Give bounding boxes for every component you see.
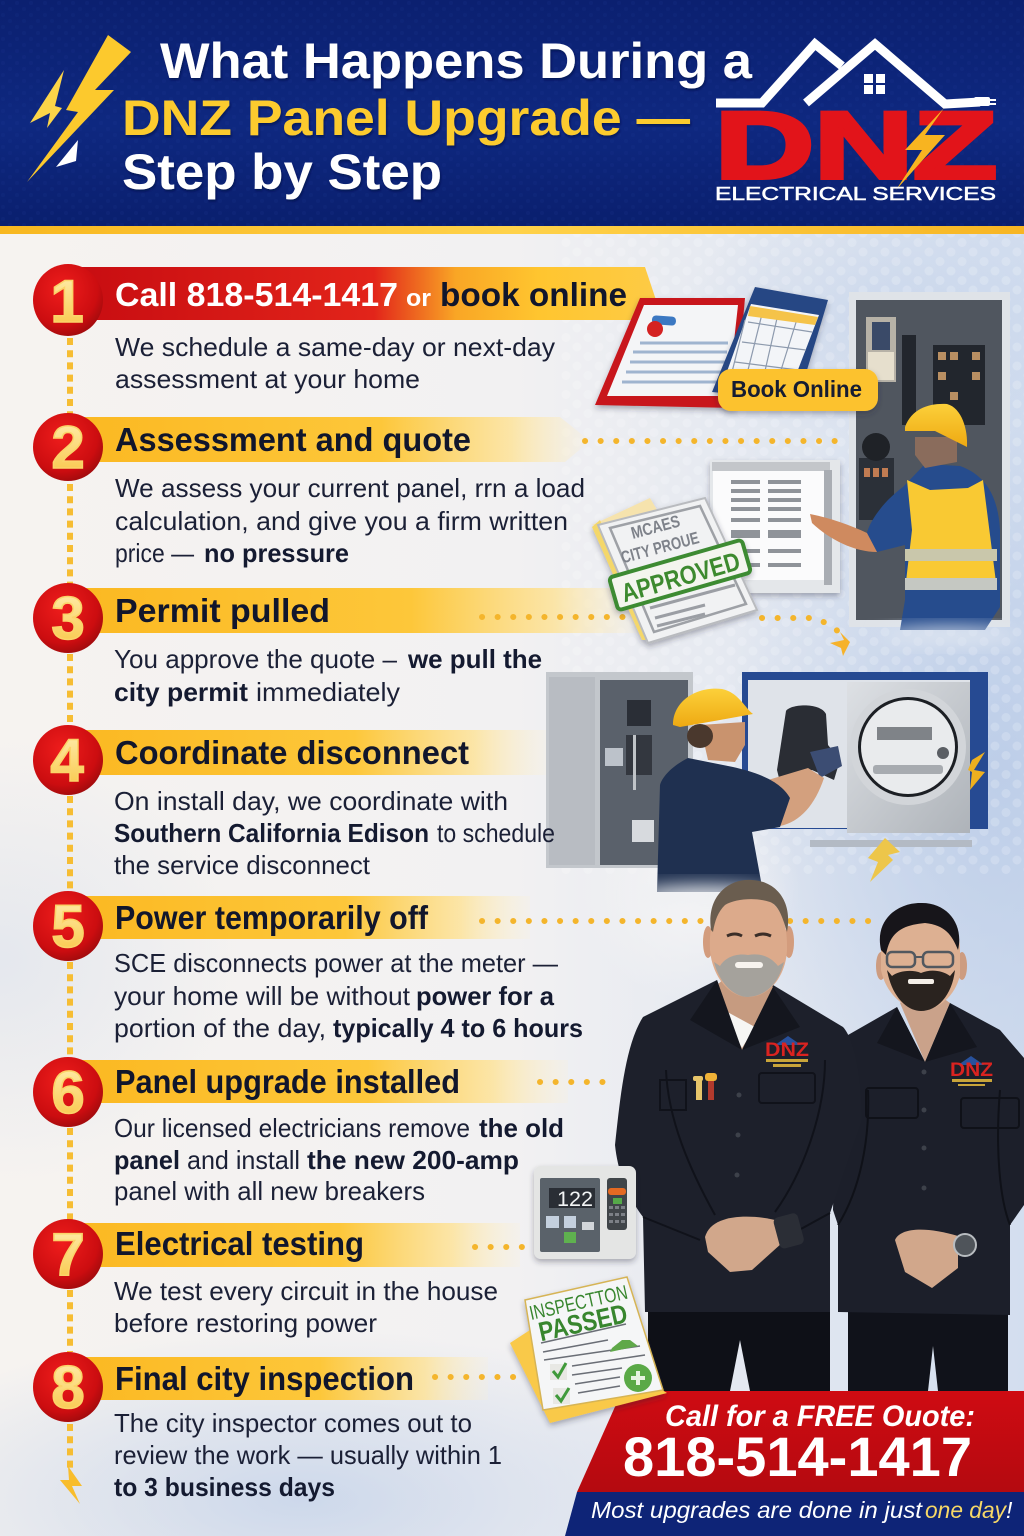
step 6 text: the new 200-amp bbox=[307, 1145, 519, 1175]
CTA tagline: ! bbox=[1006, 1497, 1013, 1523]
shirt logo right: DNZ bbox=[950, 1060, 993, 1081]
step 5 bbox=[33, 891, 583, 1043]
shirt logo left bbox=[765, 1036, 809, 1067]
step 6 band bbox=[68, 1060, 568, 1103]
step 7 badge: 7 bbox=[51, 1221, 85, 1288]
step 5 band bbox=[68, 896, 530, 939]
step 6 text bbox=[114, 1113, 564, 1206]
step 2 text: price — bbox=[115, 538, 194, 568]
CTA tagline: one day bbox=[925, 1497, 1007, 1523]
step 5 text: portion of the day, bbox=[114, 1013, 326, 1043]
illustration: testing device bbox=[534, 1166, 636, 1259]
step 1 heading: Call 818-514-1417 bbox=[115, 276, 398, 313]
illustration: clipboard, calendar and Book Online button bbox=[595, 287, 878, 411]
illustration: electrician at open panel bbox=[810, 292, 1020, 644]
step 4 heading: Coordinate disconnect bbox=[115, 734, 469, 771]
cabinet bbox=[849, 292, 1010, 627]
clipboard bbox=[595, 298, 745, 408]
step 3 bbox=[33, 583, 640, 707]
electrician left bbox=[615, 880, 862, 1391]
approved permit document: MCAES bbox=[629, 512, 682, 543]
CTA heading: Call for a FREE Ouote: bbox=[665, 1400, 975, 1433]
step 2 text: calculation, and give you a firm written bbox=[115, 506, 568, 536]
step 6 badge bbox=[33, 1057, 103, 1127]
step 2 badge bbox=[33, 413, 103, 481]
title bbox=[122, 33, 753, 200]
step 1 text bbox=[115, 332, 555, 394]
step 4 text: Southern California Edison bbox=[114, 818, 429, 848]
logo: DNZ Electrical Services bbox=[715, 44, 997, 204]
step 8 bbox=[33, 1352, 502, 1502]
step 1 badge: 1 bbox=[50, 268, 84, 335]
step 1 band bbox=[68, 267, 656, 320]
connector dots bbox=[435, 441, 880, 1377]
step 3 text: city permit bbox=[114, 677, 248, 707]
step 6 text: the old bbox=[479, 1113, 564, 1143]
step 4 badge: 4 bbox=[50, 727, 84, 794]
step 3 heading: Permit pulled bbox=[115, 592, 330, 629]
illustration: permit window and approved document bbox=[592, 460, 840, 643]
step 4 text: to schedule bbox=[437, 818, 555, 848]
illustration: inspection passed document bbox=[510, 1277, 667, 1423]
fade under lineman bbox=[635, 886, 775, 906]
step 8 band bbox=[68, 1357, 488, 1400]
step 5 text: SCE disconnects power at the meter — bbox=[114, 948, 558, 978]
step 6 text: and install bbox=[187, 1145, 300, 1175]
step 3 text bbox=[114, 644, 542, 707]
step 8 text: The city inspector comes out to bbox=[114, 1408, 472, 1438]
approved permit document bbox=[592, 498, 757, 643]
Book Online button: Book Online bbox=[731, 376, 862, 402]
illustration: inspection passed document: PASSED bbox=[536, 1298, 630, 1347]
step 7 badge bbox=[33, 1219, 103, 1289]
step 8 badge: 8 bbox=[51, 1354, 85, 1421]
step 4 bbox=[33, 725, 555, 880]
shirt logo left: DNZ bbox=[765, 1040, 809, 1061]
step 5 text bbox=[114, 948, 583, 1043]
load calculation window bbox=[710, 460, 840, 593]
meter box bbox=[742, 672, 988, 847]
approved permit document: APPROVED bbox=[618, 546, 743, 608]
step 5 heading: Power temporarily off bbox=[115, 899, 429, 936]
lineman bbox=[657, 689, 842, 892]
step 7 heading: Electrical testing bbox=[115, 1225, 364, 1262]
step 7 text bbox=[114, 1276, 498, 1338]
step 1 text: We schedule a same-day or next-day bbox=[115, 332, 555, 362]
step 3 text: immediately bbox=[256, 677, 400, 707]
electrician right bbox=[833, 903, 1024, 1391]
Book Online button bbox=[718, 369, 878, 411]
step 8 heading: Final city inspection bbox=[115, 1360, 414, 1397]
step 3 band bbox=[68, 588, 640, 633]
worker bbox=[810, 404, 1000, 630]
step 2 heading: Assessment and quote bbox=[115, 421, 471, 458]
step 2 bbox=[33, 413, 590, 568]
step 1 heading: or bbox=[406, 285, 431, 312]
CTA tagline: Most upgrades are done in just bbox=[591, 1497, 924, 1523]
call to action banner bbox=[565, 1391, 1024, 1536]
step 5 text: your home will be without bbox=[114, 981, 411, 1011]
step 7 text: before restoring power bbox=[114, 1308, 377, 1338]
step 3 text: we pull the bbox=[407, 644, 542, 674]
step 6 text: Our licensed electricians remove bbox=[114, 1113, 470, 1143]
illustration: two DNZ electricians bbox=[615, 880, 1024, 1391]
step 7 band bbox=[68, 1223, 520, 1267]
header banner bbox=[0, 0, 1024, 234]
step 5 text: power for a bbox=[416, 981, 555, 1011]
step 4 text bbox=[114, 786, 555, 880]
step 3 badge: 3 bbox=[51, 585, 85, 652]
step 7 bbox=[33, 1219, 520, 1338]
step 8 text: review the work — usually within 1 bbox=[114, 1440, 502, 1470]
illustration: inspection passed document: INSPECTTON bbox=[527, 1282, 630, 1325]
step 4 band bbox=[68, 730, 546, 775]
title: DNZ Panel Upgrade — bbox=[122, 90, 690, 146]
step 6 text: panel bbox=[114, 1145, 180, 1175]
CTA phone number: 818-514-1417 bbox=[623, 1425, 972, 1488]
logo: DNZ Electrical Services: ELECTRICAL SERVICES bbox=[715, 184, 996, 204]
logo: DNZ Electrical Services: DNZ bbox=[715, 93, 997, 199]
step 8 text: to 3 business days bbox=[114, 1472, 335, 1502]
step 6 text: panel with all new breakers bbox=[114, 1176, 425, 1206]
fade under worker bbox=[880, 628, 1020, 644]
step 2 text bbox=[115, 473, 585, 568]
step 1 badge bbox=[33, 264, 103, 336]
step 2 badge: 2 bbox=[51, 414, 85, 481]
step 5 text: typically 4 to 6 hours bbox=[333, 1013, 583, 1043]
step 1 text: assessment at your home bbox=[115, 364, 420, 394]
icon: small bolt bbox=[868, 838, 900, 882]
shirt logo right bbox=[950, 1056, 993, 1086]
step 3 badge bbox=[33, 583, 103, 653]
approved permit document: CITY PROUE bbox=[619, 528, 701, 567]
step 1 bbox=[33, 264, 656, 394]
step 5 badge: 5 bbox=[51, 893, 85, 960]
calendar bbox=[712, 287, 828, 400]
step 6 bbox=[33, 1057, 568, 1206]
step 6 heading: Panel upgrade installed bbox=[115, 1063, 460, 1100]
step 2 text: We assess your current panel, rrn a load bbox=[115, 473, 585, 503]
step 1 heading bbox=[115, 276, 627, 313]
title: What Happens During a bbox=[160, 33, 753, 89]
title: Step by Step bbox=[122, 144, 442, 200]
icon: lightning bolts bbox=[27, 35, 131, 182]
illustration: meter disconnect bbox=[546, 672, 988, 906]
step 5 badge bbox=[33, 891, 103, 961]
step 8 text bbox=[114, 1408, 502, 1502]
step 4 text: On install day, we coordinate with bbox=[114, 786, 508, 816]
timeline connector bbox=[60, 338, 82, 1504]
step 7 text: We test every circuit in the house bbox=[114, 1276, 498, 1306]
step 6 badge: 6 bbox=[51, 1059, 85, 1126]
step 2 band bbox=[68, 417, 590, 462]
step 1 heading: book online bbox=[440, 276, 627, 313]
illustration: testing device: 122 bbox=[557, 1188, 593, 1211]
step 4 badge bbox=[33, 725, 103, 795]
step 4 text: the service disconnect bbox=[114, 850, 371, 880]
step 8 badge bbox=[33, 1352, 103, 1422]
step 3 text: You approve the quote – bbox=[114, 644, 398, 674]
open breaker panel bbox=[546, 672, 693, 868]
step 2 text: no pressure bbox=[204, 538, 349, 568]
